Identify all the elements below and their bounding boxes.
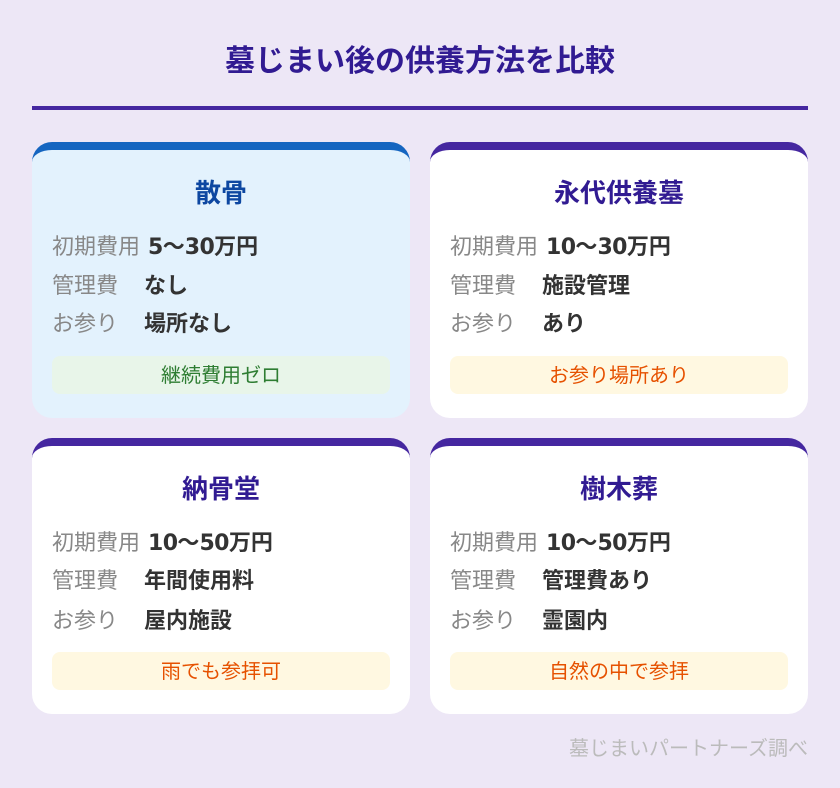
value: management fee: 施設管理 [542,274,630,299]
label: management fee: 管理費 [52,274,118,299]
tag: benefit [450,652,788,690]
value: visiting: あり [542,312,586,337]
label: visiting: お参り [450,312,516,337]
label: management fee: 管理費 [52,569,118,594]
label: management fee: 管理費 [450,569,516,594]
label: visiting: お参り [52,312,118,337]
title: 墓じまい後の供養方法を比較 [225,44,615,79]
value: initial cost: 10〜50万円 [148,531,273,556]
value: management fee: 管理費あり [542,569,652,594]
value: initial cost: 10〜30万円 [546,235,671,260]
heading: 樹木葬: 樹木葬 [580,475,658,505]
heading: 納骨堂: 納骨堂 [182,475,260,505]
label: visiting: お参り [52,609,118,634]
label: initial cost: 初期費用 [52,235,140,260]
source footer: 墓じまいパートナーズ調べ [569,736,808,760]
label: initial cost: 初期費用 [52,531,140,556]
label: visiting: お参り [450,609,516,634]
value: visiting: 屋内施設 [144,609,232,634]
value: management fee: 年間使用料 [144,569,254,594]
label: management fee: 管理費 [450,274,516,299]
panel: 永代供養墓 [430,142,808,418]
tag: benefit: 自然の中で参拝 [549,659,689,683]
value: visiting: 霊園内 [542,609,608,634]
heading: 永代供養墓: 永代供養墓 [554,179,684,209]
label: initial cost: 初期費用 [450,235,538,260]
value: management fee: なし [144,274,188,299]
heading: 散骨: 散骨 [195,179,247,209]
label: initial cost: 初期費用 [450,531,538,556]
tag: benefit [450,356,788,394]
panel: 納骨堂 [32,438,410,714]
tag: benefit [52,652,390,690]
value: initial cost: 10〜50万円 [546,531,671,556]
panel: 樹木葬 [430,438,808,714]
tag: benefit: お参り場所あり [549,363,689,387]
tag: benefit [52,356,390,394]
tag: benefit: 継続費用ゼロ [161,363,281,387]
tag: benefit: 雨でも参拝可 [161,659,281,683]
value: visiting: 場所なし [144,312,232,337]
value: initial cost: 5〜30万円 [148,235,258,260]
panel: 散骨 [32,142,410,418]
